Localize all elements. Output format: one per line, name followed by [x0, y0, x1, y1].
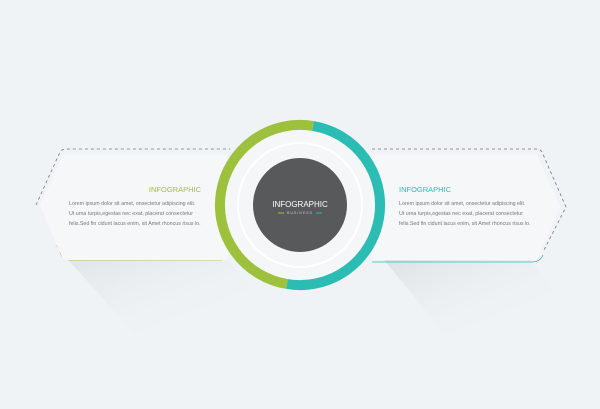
text block right: [399, 201, 531, 227]
text block left: [69, 201, 201, 227]
text block right: Ut urna turpis,egestas nec exat, placerat consectetur: [399, 211, 523, 217]
text block left: Ut urna turpis,egestas nec exat, placerat consectetur: [69, 211, 193, 217]
center ring: BUSINESS: [287, 211, 313, 215]
center disk: [253, 158, 347, 252]
text block right: felis.Sed fin cidunt lacus enim, sit Amet rhoncus risus lo.: [399, 221, 531, 227]
text block left: Lorem ipsum dolor sit amet, onsectetur adipiscing elit.: [69, 201, 195, 207]
long shadows: [55, 245, 590, 340]
heading right: INFOGRAPHIC: [399, 185, 452, 194]
center ring: [220, 125, 380, 285]
heading left: INFOGRAPHIC: [149, 185, 202, 194]
text block right: Lorem ipsum dolor sit amet, onsectetur adipiscing elit.: [399, 201, 525, 207]
center ring: INFOGRAPHIC: [272, 200, 328, 209]
panel: left: [36, 149, 230, 260]
text block left: felis.Sed fin cidunt lacus enim, sit Amet rhoncus risus lo.: [69, 221, 201, 227]
panel: right: [372, 149, 566, 262]
